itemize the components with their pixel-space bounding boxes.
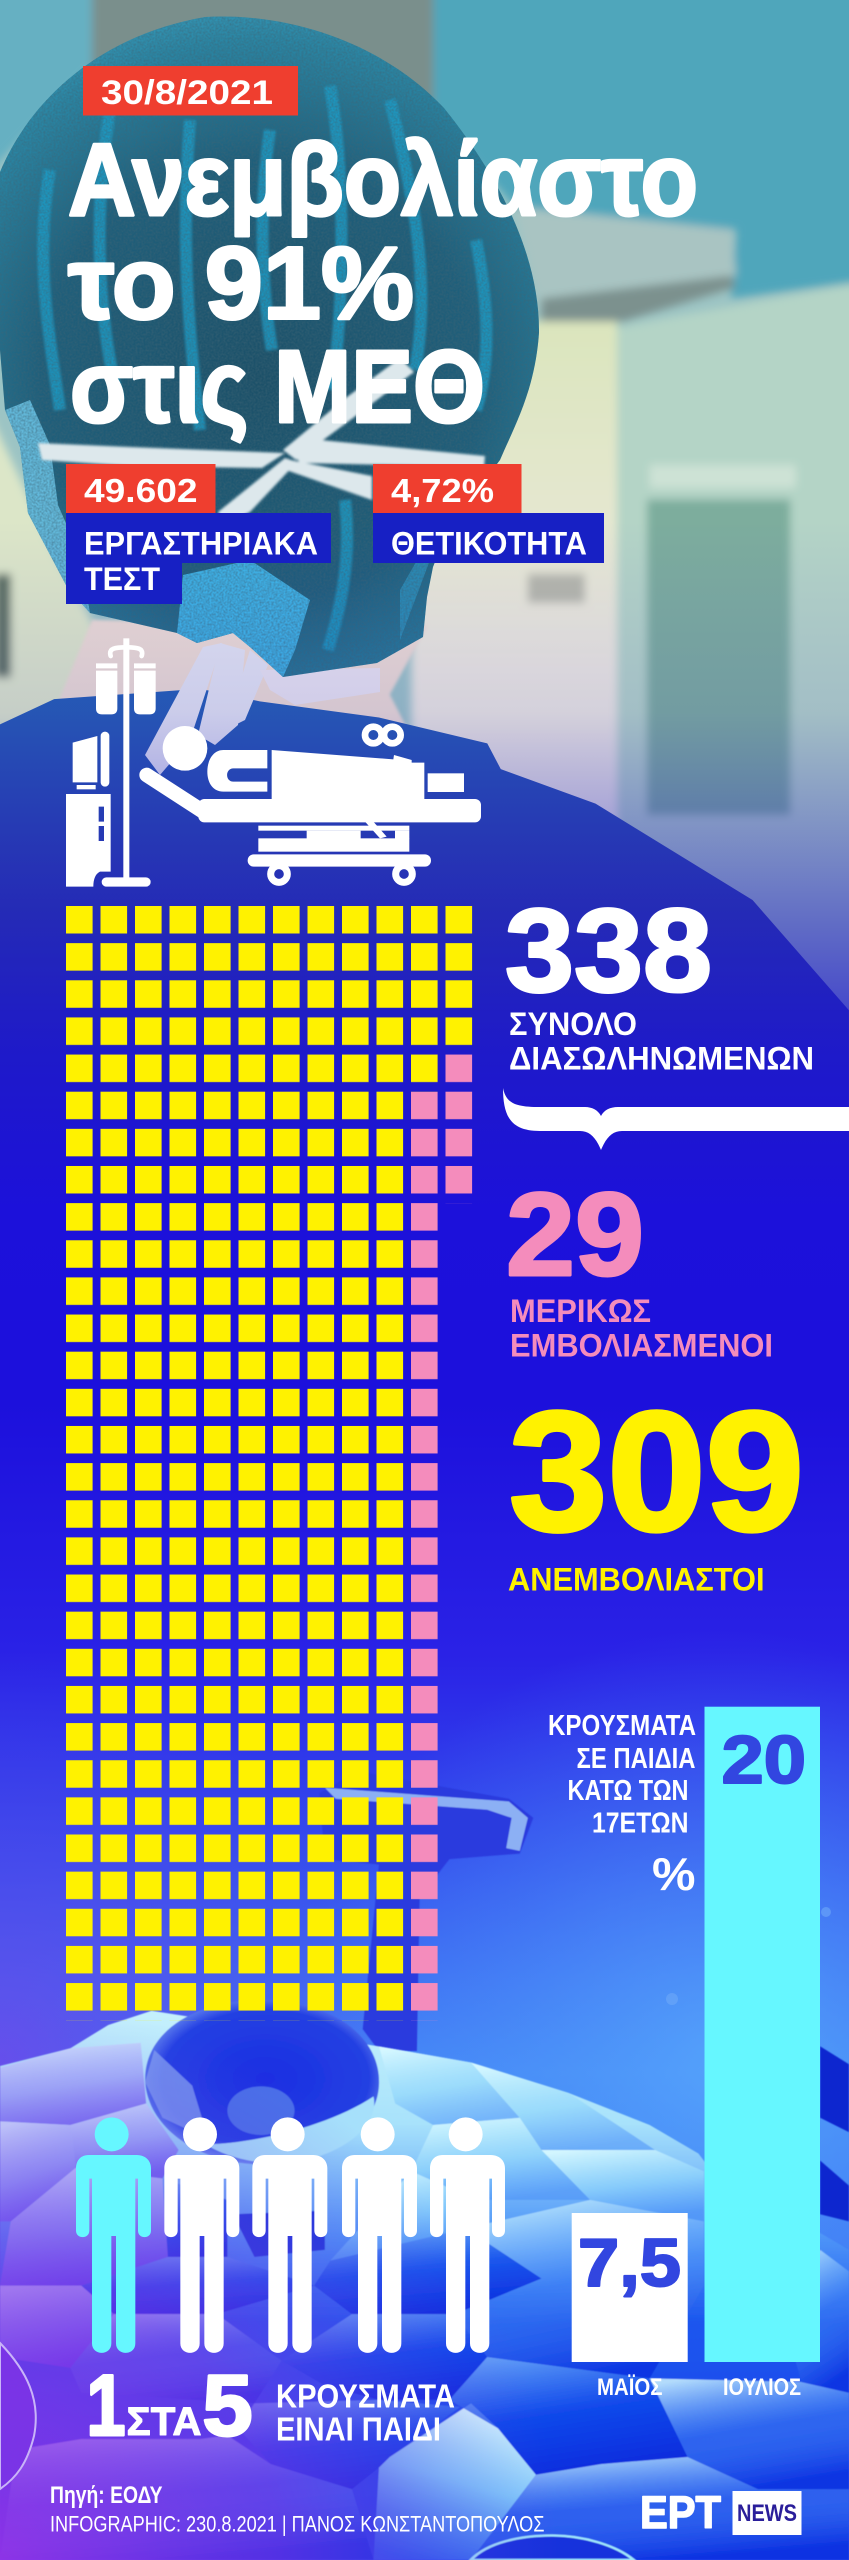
chart label: cases in children under 17: ΚΑΤΩ ΤΩΝ xyxy=(568,1775,688,1807)
date badge xyxy=(83,66,298,116)
stat: total intubated 338: ΣΥΝΟΛΟ xyxy=(509,1006,637,1042)
callout: one in five cases is a child: 5 xyxy=(202,2358,252,2454)
waffle chart: 338 intubated, 309 yellow unvaccinated and 29 pink partially vaccinated xyxy=(66,906,480,2020)
stat: lab tests: 49.602 xyxy=(84,472,198,509)
source and credits: Πηγή: ΕΟΔΥ xyxy=(50,2482,162,2509)
stat: total intubated 338: 338 xyxy=(505,885,712,1017)
title: Ανεμβολίαστο xyxy=(68,122,698,237)
stat: partially vaccinated 29: ΜΕΡΙΚΩΣ xyxy=(510,1293,651,1329)
chart label: cases in children under 17: ΣΕ ΠΑΙΔΙΑ xyxy=(576,1743,696,1775)
background: deep blue fade over the gown xyxy=(0,520,849,1480)
icon: five people, one highlighted xyxy=(76,2117,505,2353)
bar chart: May vs July: 7,5 xyxy=(578,2225,681,2301)
callout: one in five cases is a child: 1 xyxy=(86,2358,126,2454)
logo: ERT News: ΕΡΤ xyxy=(640,2487,721,2538)
stat: lab tests: ΤΕΣΤ xyxy=(84,561,160,597)
date badge: 30/8/2021 xyxy=(101,74,273,112)
source and credits: INFOGRAPHIC: 230.8.2021 | ΠΑΝΟΣ ΚΩΝΣΤΑΝΤΟΠΟΥΛΟΣ xyxy=(50,2512,544,2536)
bar chart: May vs July xyxy=(572,1707,820,2401)
chart label: cases in children under 17: % xyxy=(652,1848,696,1900)
stat: positivity: 4,72% xyxy=(391,472,494,509)
callout: one in five cases is a child: ΣΤΑ xyxy=(126,2400,202,2444)
background: hospital photo with surgeon in hairnet xyxy=(0,0,849,1107)
chart label: cases in children under 17 xyxy=(548,1710,696,1900)
bar chart: May vs July: ΙΟΥΛΙΟΣ xyxy=(723,2374,801,2401)
title: στις ΜΕΘ xyxy=(70,329,485,444)
chart label: cases in children under 17: ΚΡΟΥΣΜΑΤΑ xyxy=(548,1710,696,1742)
icon: ICU bed with patient and IV drip xyxy=(66,638,481,887)
stat: partially vaccinated 29: ΕΜΒΟΛΙΑΣΜΕΝΟΙ xyxy=(510,1328,773,1364)
bar chart: May vs July: 20 xyxy=(722,1722,806,1798)
stat: total intubated 338 xyxy=(505,885,814,1076)
background: lower blue gradient with virus surface xyxy=(0,1400,849,2560)
stat: partially vaccinated 29 xyxy=(506,1169,773,1364)
logo: ERT News: NEWS xyxy=(737,2500,797,2527)
stat: lab tests: ΕΡΓΑΣΤΗΡΙΑΚΑ xyxy=(84,526,318,562)
callout: one in five cases is a child xyxy=(86,2358,455,2454)
stat: positivity xyxy=(373,464,604,563)
callout: one in five cases is a child: ΕΙΝΑΙ ΠΑΙΔΙ xyxy=(276,2410,441,2448)
callout: one in five cases is a child: ΚΡΟΥΣΜΑΤΑ xyxy=(276,2378,455,2414)
source and credits xyxy=(50,2482,544,2536)
bar chart: May vs July: ΜΑΪΟΣ xyxy=(597,2374,662,2401)
title xyxy=(68,122,698,444)
stat: partially vaccinated 29: 29 xyxy=(506,1169,644,1301)
title: το 91% xyxy=(68,226,414,340)
stat: positivity: ΘΕΤΙΚΟΤΗΤΑ xyxy=(391,526,587,562)
curly brace xyxy=(503,1088,849,1150)
stat: lab tests xyxy=(66,464,331,604)
stat: unvaccinated 309: ΑΝΕΜΒΟΛΙΑΣΤΟΙ xyxy=(508,1562,764,1598)
logo: ERT News xyxy=(640,2487,802,2538)
stat: total intubated 338: ΔΙΑΣΩΛΗΝΩΜΕΝΩΝ xyxy=(509,1040,814,1076)
chart label: cases in children under 17: 17ΕΤΩΝ xyxy=(592,1808,688,1840)
stat: unvaccinated 309: 309 xyxy=(509,1377,804,1567)
